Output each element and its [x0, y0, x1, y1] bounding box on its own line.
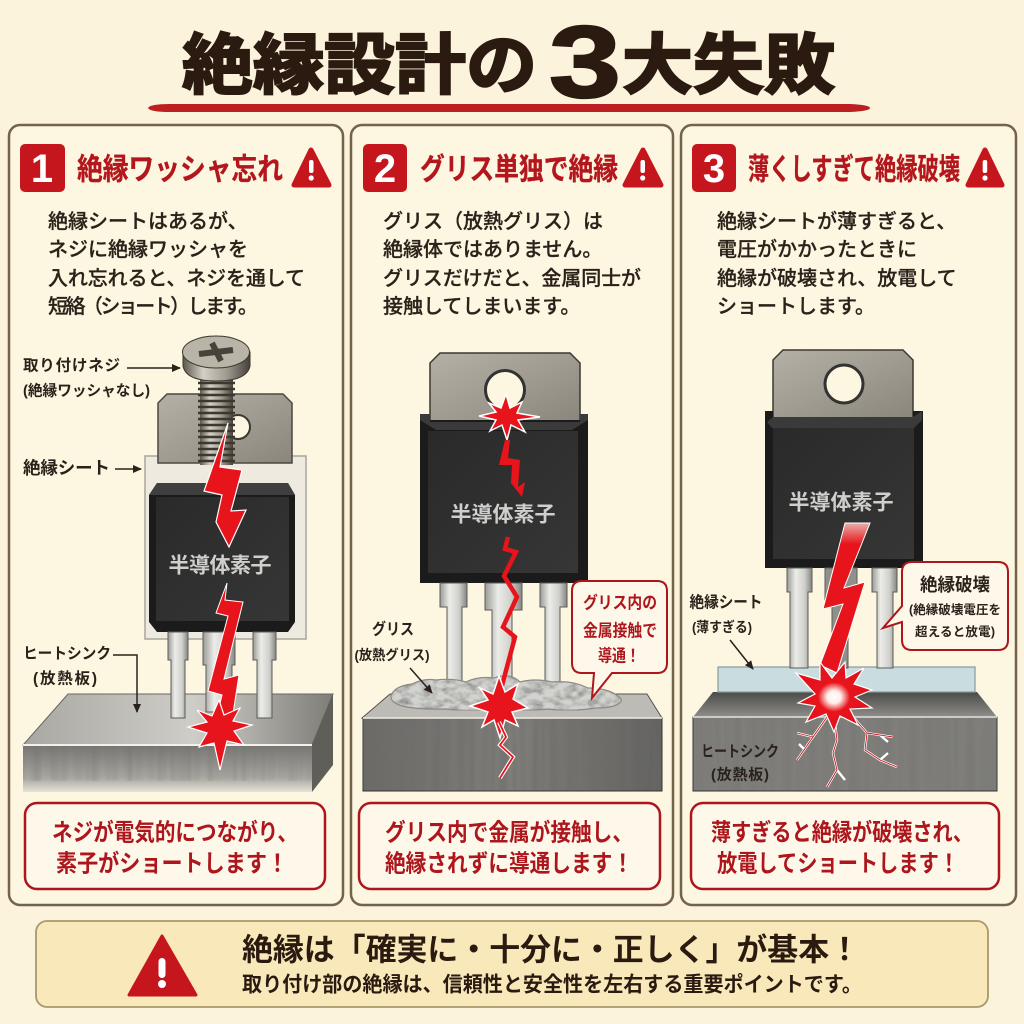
panel 1 description: 短絡（ショート）します。	[48, 295, 258, 318]
callout: metal contact in grease	[572, 581, 667, 698]
illustration: insulating sheet 1	[145, 456, 306, 639]
title: 3	[549, 5, 621, 119]
panel 2 description: グリスだけだと、金属同士が	[383, 267, 641, 290]
panel 3 description: 絶縁が破壊され、放電して	[717, 267, 957, 290]
panel 2 conclusion callout	[359, 803, 660, 889]
label: insulating sheet 1: 絶縁シート	[23, 458, 110, 478]
illustration: pins 3	[787, 568, 897, 668]
panel 1: forgotten washer	[9, 125, 343, 905]
footer banner	[36, 921, 988, 1007]
callout: metal contact in grease: 金属接触で	[583, 620, 657, 640]
icon: discharge crack 2	[499, 722, 513, 778]
panel 2 description	[383, 210, 641, 318]
label: mounting screw: (絶縁ワッシャなし)	[23, 382, 150, 400]
panel 1 description: ネジに絶縁ワッシャを	[48, 238, 248, 261]
footer headline: 絶縁は「確実に・十分に・正しく」が基本！	[242, 932, 860, 968]
panel 2 conclusion callout: グリス内で金属が接触し、	[385, 818, 633, 846]
label: heatsink 1	[23, 644, 137, 712]
panel 3: too thin	[681, 125, 1016, 905]
illustration: heatsink 2	[362, 694, 662, 791]
title	[182, 5, 835, 119]
illustration: semiconductor package 3	[765, 411, 923, 568]
illustration: thermal grease	[391, 676, 622, 710]
illustration: thin insulating sheet	[718, 667, 975, 692]
icon: footer warning triangle	[129, 936, 196, 995]
label: heatsink 3	[701, 742, 779, 784]
label: grease: (放熱グリス)	[354, 647, 430, 663]
title underline	[148, 104, 870, 112]
panel 3 description: 電圧がかかったときに	[717, 238, 917, 261]
label: heatsink 1: ヒートシンク	[23, 644, 111, 662]
panel 3 conclusion callout: 放電してショートします！	[717, 850, 959, 878]
callout: metal contact in grease: グリス内の	[583, 592, 657, 612]
panel 3 conclusion callout	[691, 803, 999, 889]
label: heatsink 1: (放熱板)	[33, 670, 97, 688]
panel 2 conclusion callout: 絶縁されずに導通します！	[385, 850, 633, 878]
panel 3 description: 絶縁シートが薄すぎると、	[717, 210, 956, 233]
icon: upper spark 2	[479, 394, 540, 440]
illustration: metal tab 3	[773, 350, 913, 418]
icon: lower thin bolt 2	[500, 537, 517, 693]
label: mounting screw: 取り付けネジ	[23, 356, 120, 374]
label: thin insulating sheet: 絶縁シート	[690, 592, 762, 612]
illustration: screw	[182, 336, 250, 465]
panel 3 conclusion callout: 薄すぎると絶縁が破壊され、	[711, 818, 973, 846]
callout: dielectric breakdown	[883, 562, 1008, 650]
illustration: semiconductor package 2: 半導体素子	[450, 504, 556, 526]
panel 1 conclusion callout: ネジが電気的につながり、	[52, 818, 298, 846]
panel 1 description	[48, 210, 305, 318]
panel 1 conclusion callout: 素子がショートします！	[56, 850, 288, 878]
icon: lower spark 2	[470, 676, 528, 738]
panel 1 heading: 絶縁ワッシャ忘れ	[77, 154, 283, 186]
illustration: heatsink 1	[23, 694, 333, 792]
illustration: pins 2	[440, 583, 567, 682]
panel 3 number badge: 3	[703, 147, 725, 191]
icon: upper thin bolt 2	[499, 440, 525, 497]
label: grease: グリス	[372, 620, 414, 638]
title: 絶縁設計の	[182, 28, 537, 102]
icon: lower lightning bolt 1	[208, 583, 243, 733]
panel 2 description: グリス（放熱グリス）は	[383, 210, 603, 233]
panel 2 number badge	[363, 144, 407, 192]
illustration: semiconductor package 2	[420, 414, 588, 583]
icon: breakdown cracks	[797, 707, 897, 787]
panel 2 description: 絶縁体ではありません。	[383, 238, 602, 261]
panel 2 heading: グリス単独で絶縁	[420, 154, 618, 186]
icon: upper lightning bolt 1	[204, 423, 246, 547]
label: grease	[354, 620, 432, 693]
panel 1 number badge: 1	[31, 147, 53, 191]
panel 3 description: ショートします。	[717, 296, 875, 318]
label: mounting screw	[23, 356, 180, 400]
icon: warning triangle 2	[625, 150, 661, 185]
panel 1 conclusion callout	[25, 803, 325, 889]
label: heatsink 3: (放熱板)	[711, 766, 769, 784]
panel 3 number badge	[692, 144, 736, 192]
panel 1 number badge	[20, 144, 65, 192]
footer subtext: 取り付け部の絶縁は、信頼性と安全性を左右する重要ポイントです。	[242, 974, 862, 996]
icon: breakdown burst	[796, 662, 872, 732]
panel 1 description: 絶縁シートはあるが、	[48, 210, 248, 233]
illustration: semiconductor package 3: 半導体素子	[788, 492, 894, 514]
icon: big lightning bolt 3	[820, 523, 870, 673]
illustration: semiconductor package 1: 半導体素子	[168, 554, 272, 578]
callout: metal contact in grease: 導通！	[598, 646, 640, 666]
icon: spark burst 1	[188, 700, 252, 770]
callout: dielectric breakdown: 絶縁破壊	[920, 575, 990, 595]
panel 3 description	[717, 210, 957, 318]
panel 2 number badge: 2	[374, 147, 396, 191]
illustration: metal tab 2	[430, 353, 580, 422]
label: heatsink 3: ヒートシンク	[701, 742, 779, 760]
illustration: pins 1	[168, 632, 276, 718]
illustration: semiconductor package 1	[149, 483, 295, 632]
panel 1 description: 入れ忘れると、ネジを通して	[48, 267, 305, 290]
illustration: heatsink 3	[693, 692, 997, 791]
icon: warning triangle 3	[968, 150, 1002, 185]
panel 2: grease only	[351, 125, 673, 905]
callout: dielectric breakdown: 超えると放電)	[915, 624, 995, 639]
icon: warning triangle 1	[294, 150, 329, 185]
illustration: metal tab 1	[158, 394, 292, 463]
title: 大失敗	[622, 28, 835, 102]
panel 2 description: 接触してしまいます。	[383, 295, 580, 318]
callout: dielectric breakdown: (絶縁破壊電圧を	[909, 602, 1001, 617]
label: thin insulating sheet	[690, 592, 762, 669]
label: thin insulating sheet: (薄すぎる)	[692, 619, 752, 635]
